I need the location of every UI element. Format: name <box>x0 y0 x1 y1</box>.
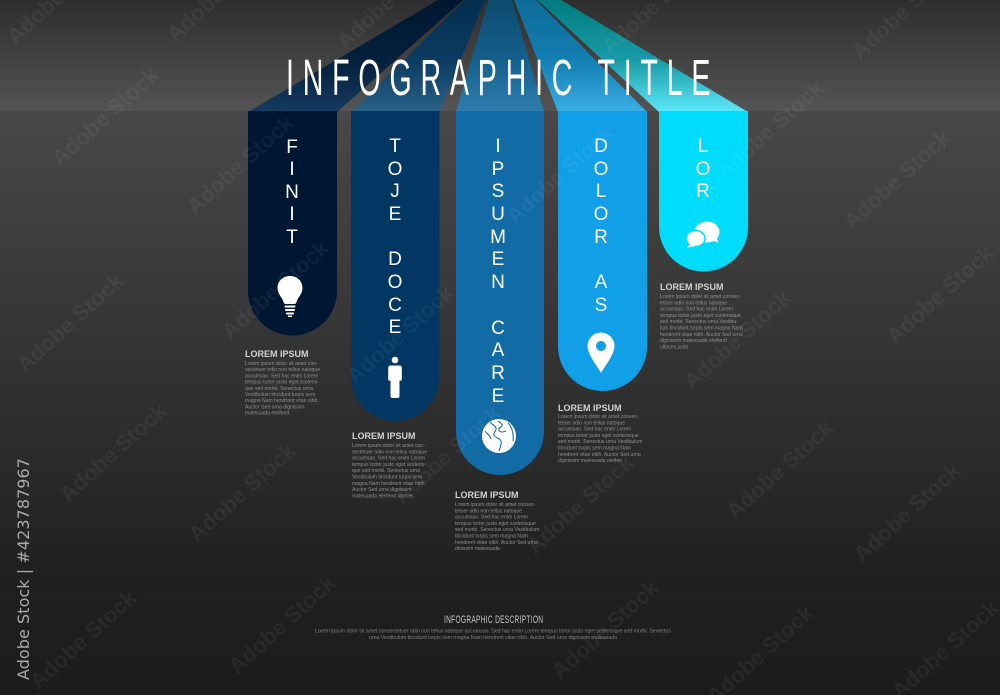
column 1: Finit: I <box>289 204 295 225</box>
text block 1: que sed morbi. Senectus urna <box>245 386 313 392</box>
column 4: Dolor As: O <box>594 159 608 180</box>
text block 4: dignissim malesuada eleifen <box>558 458 622 464</box>
text block 3: tetuer odio non tellus natoque <box>455 508 522 514</box>
text block 4 <box>558 403 642 464</box>
column 5: Lor <box>659 111 748 272</box>
text block 4: Lorem ipsum dolor sit amet consec- <box>558 414 639 420</box>
icon: light bulb <box>278 276 302 317</box>
text block 3: hendrerit vitae nibh. Auctor Sed urna <box>455 540 538 546</box>
text block 2: LOREM IPSUM <box>352 431 416 441</box>
text block 1: Lorem ipsum dolor sit amet con- <box>245 361 318 367</box>
text block 3: tincidunt turpis sem magna Nam <box>455 534 528 540</box>
text block 5: Lorem ipsum dolor sit amet consec- <box>660 294 741 300</box>
text block 2: Vestibulum tincidunt turpis sem <box>352 474 422 480</box>
text block 5 <box>660 282 743 350</box>
column 4: Dolor As: A <box>595 272 608 293</box>
text block 1: magna Nam hendrerit vitae nibh. <box>245 398 319 404</box>
watermarks: Adobe Stock <box>722 415 839 524</box>
text block 4: tetuer odio non tellus natoque <box>558 420 625 426</box>
watermarks: Adobe Stock <box>849 458 966 567</box>
stock id side label: Adobe Stock | #423787967 <box>14 458 33 680</box>
text block 3 <box>455 490 539 552</box>
column 2: Toje Doce: E <box>389 317 401 338</box>
column 2: Toje Doce: T <box>389 136 401 157</box>
column 2: Toje Doce: D <box>388 249 402 270</box>
watermarks: Adobe Stock <box>342 280 459 389</box>
text block 2: que sed morbi. Senectus urna <box>352 468 420 474</box>
text block 3: tempus tortor justo eget scelerisque <box>455 521 536 527</box>
text block 5: hendrerit vitae nibh. Auctor Sed urna <box>660 332 743 338</box>
text block 5: lum tincidunt turpis sem magna Nam <box>660 326 743 332</box>
text block 2: magna Nam hendrerit vitae nibh. <box>352 481 426 487</box>
text block 1: accumsan. Sed hac enim Lorem <box>245 373 318 379</box>
column 2: Toje Doce: O <box>388 272 402 293</box>
text block 2: Auctor Sed urna dignissim <box>352 487 411 493</box>
text block 2: accumsan. Sed hac enim Lorem <box>352 456 425 462</box>
watermarks: Adobe Stock <box>184 438 301 547</box>
column 4: Dolor As: R <box>594 227 608 248</box>
text block 5: dignissim malesuada eleifend <box>660 338 727 344</box>
column 1: Finit: I <box>289 159 295 180</box>
column 2: Toje Doce: C <box>388 295 402 316</box>
column 3: Ipsumen Care: C <box>491 318 505 339</box>
column 3: Ipsumen Care: R <box>491 363 505 384</box>
text block 3: accumsan. Sed hac enim Lorem <box>455 515 528 521</box>
watermarks: Adobe Stock <box>502 120 619 229</box>
perspective bands <box>248 0 748 112</box>
text block 1: Vestibulum tincidunt turpis sem <box>245 392 315 398</box>
text block 1: tempus tortor justo eget sceleris- <box>245 380 319 386</box>
watermarks: Adobe Stock <box>224 570 341 679</box>
watermarks: Adobe Stock <box>389 400 506 509</box>
column 3: Ipsumen Care <box>456 111 544 475</box>
column 1: Finit: F <box>286 137 298 158</box>
text block 2: sectetuer odio non tellus natoque <box>352 449 427 455</box>
title: INFOGRAPHIC TITLE <box>286 49 710 106</box>
column 3: Ipsumen Care: M <box>490 227 506 248</box>
column 3: Ipsumen Care: E <box>492 386 504 407</box>
icon: speech bubbles <box>686 222 720 248</box>
infographic description: urna Vestibulum tincidunt turpis sem magna Nam hendrerit vitae nibh. Auctor Sed urna dignissim malesuada <box>369 635 617 641</box>
watermarks: Adobe Stock <box>547 575 664 684</box>
text block 3: dinissim malesuada <box>455 546 500 552</box>
column 4: Dolor As: S <box>595 295 607 316</box>
watermarks: Adobe Stock <box>217 235 334 344</box>
column 4: Dolor As: O <box>594 204 608 225</box>
text block 1 <box>245 349 320 417</box>
text block 5: ultrices justo <box>660 344 688 350</box>
watermarks: Adobe Stock <box>882 240 999 349</box>
text block 5: accumsan. Sed hac enim Lorem <box>660 307 733 313</box>
text block 4: accumsan. Sed hac enim Lorem <box>558 427 631 433</box>
text block 4: sed morbi. Senectus urna Vestibulum <box>558 439 642 445</box>
column 3: Ipsumen Care: S <box>492 181 504 202</box>
watermarks: Adobe Stock <box>47 62 164 171</box>
column 5: Lor: O <box>696 159 710 180</box>
text block 3: Lorem ipsum dolor sit amet consec- <box>455 502 536 508</box>
column 3: Ipsumen Care: E <box>492 249 504 270</box>
text block 2: Lorem ipsum dolor sit amet con- <box>352 443 425 449</box>
watermarks: Adobe Stock <box>679 285 796 394</box>
column 1: Finit: T <box>286 227 298 248</box>
watermarks: Adobe Stock <box>55 398 172 507</box>
column 3: Ipsumen Care: N <box>491 272 505 293</box>
text block 1: malesuada eleifend <box>245 411 289 417</box>
text block 2: malesuada eleifend ultrices <box>352 493 414 499</box>
watermarks: Adobe Stock <box>12 268 129 377</box>
watermarks: Adobe Stock <box>25 585 142 694</box>
icon: person <box>388 357 402 398</box>
watermarks: Adobe Stock <box>712 75 829 184</box>
infographic description <box>315 613 671 641</box>
text block 5: tempus tortor justo eget scelerisque <box>660 313 741 319</box>
text block 1: sectetuer odio non tellus natoque <box>245 367 320 373</box>
infographic description: Lorem ipsum dolor sit amet consectetuer odio non tellus natoque accumsan. Sed hac enim Lorem tempus tortor justo eget scelerisque sed morbi. Senectus <box>315 628 671 634</box>
infographic description: INFOGRAPHIC DESCRIPTION <box>444 613 543 625</box>
watermarks: Adobe Stock <box>522 450 639 559</box>
column 2: Toje Doce: O <box>388 159 402 180</box>
column 2: Toje Doce: J <box>390 181 400 202</box>
text block 2 <box>352 431 427 499</box>
text block 5: tetuer odio non tellus natoque <box>660 300 727 306</box>
column 4: Dolor As <box>558 111 647 391</box>
column 5: Lor: R <box>696 181 710 202</box>
column 3: Ipsumen Care: I <box>495 136 501 157</box>
column 1: Finit <box>248 111 337 336</box>
text block 4: LOREM IPSUM <box>558 403 622 413</box>
text block 4: tincidunt turpis sem magna Nam <box>558 446 631 452</box>
column 3: Ipsumen Care: U <box>491 204 505 225</box>
icon: globe <box>482 419 516 453</box>
column 4: Dolor As: L <box>596 181 606 202</box>
icon: map pin <box>588 332 614 373</box>
column 5: Lor: L <box>698 136 708 157</box>
text block 1: Auctor Sed urna dignissim <box>245 404 304 410</box>
text block 1: LOREM IPSUM <box>245 349 309 359</box>
text block 4: tempus tortor justo eget scelerisque <box>558 433 639 439</box>
column 3: Ipsumen Care: A <box>492 340 505 361</box>
column 2: Toje Doce <box>351 111 440 421</box>
column 1: Finit: N <box>285 182 299 203</box>
watermarks: Adobe Stock <box>182 110 299 219</box>
text block 4: hendrerit vitae nibh. Auctor Sed urna <box>558 452 641 458</box>
text block 3: LOREM IPSUM <box>455 490 519 500</box>
watermarks: Adobe Stock <box>839 125 956 234</box>
text block 5: sed morbi. Senectus urna Vestibu- <box>660 319 738 325</box>
column 3: Ipsumen Care: P <box>492 159 504 180</box>
text block 5: LOREM IPSUM <box>660 282 724 292</box>
column 2: Toje Doce: E <box>389 204 401 225</box>
column 4: Dolor As: D <box>594 136 608 157</box>
text block 2: tempus tortor justo eget sceleris- <box>352 462 426 468</box>
text block 3: sed morbi. Senectus urna Vestibulum <box>455 527 539 533</box>
